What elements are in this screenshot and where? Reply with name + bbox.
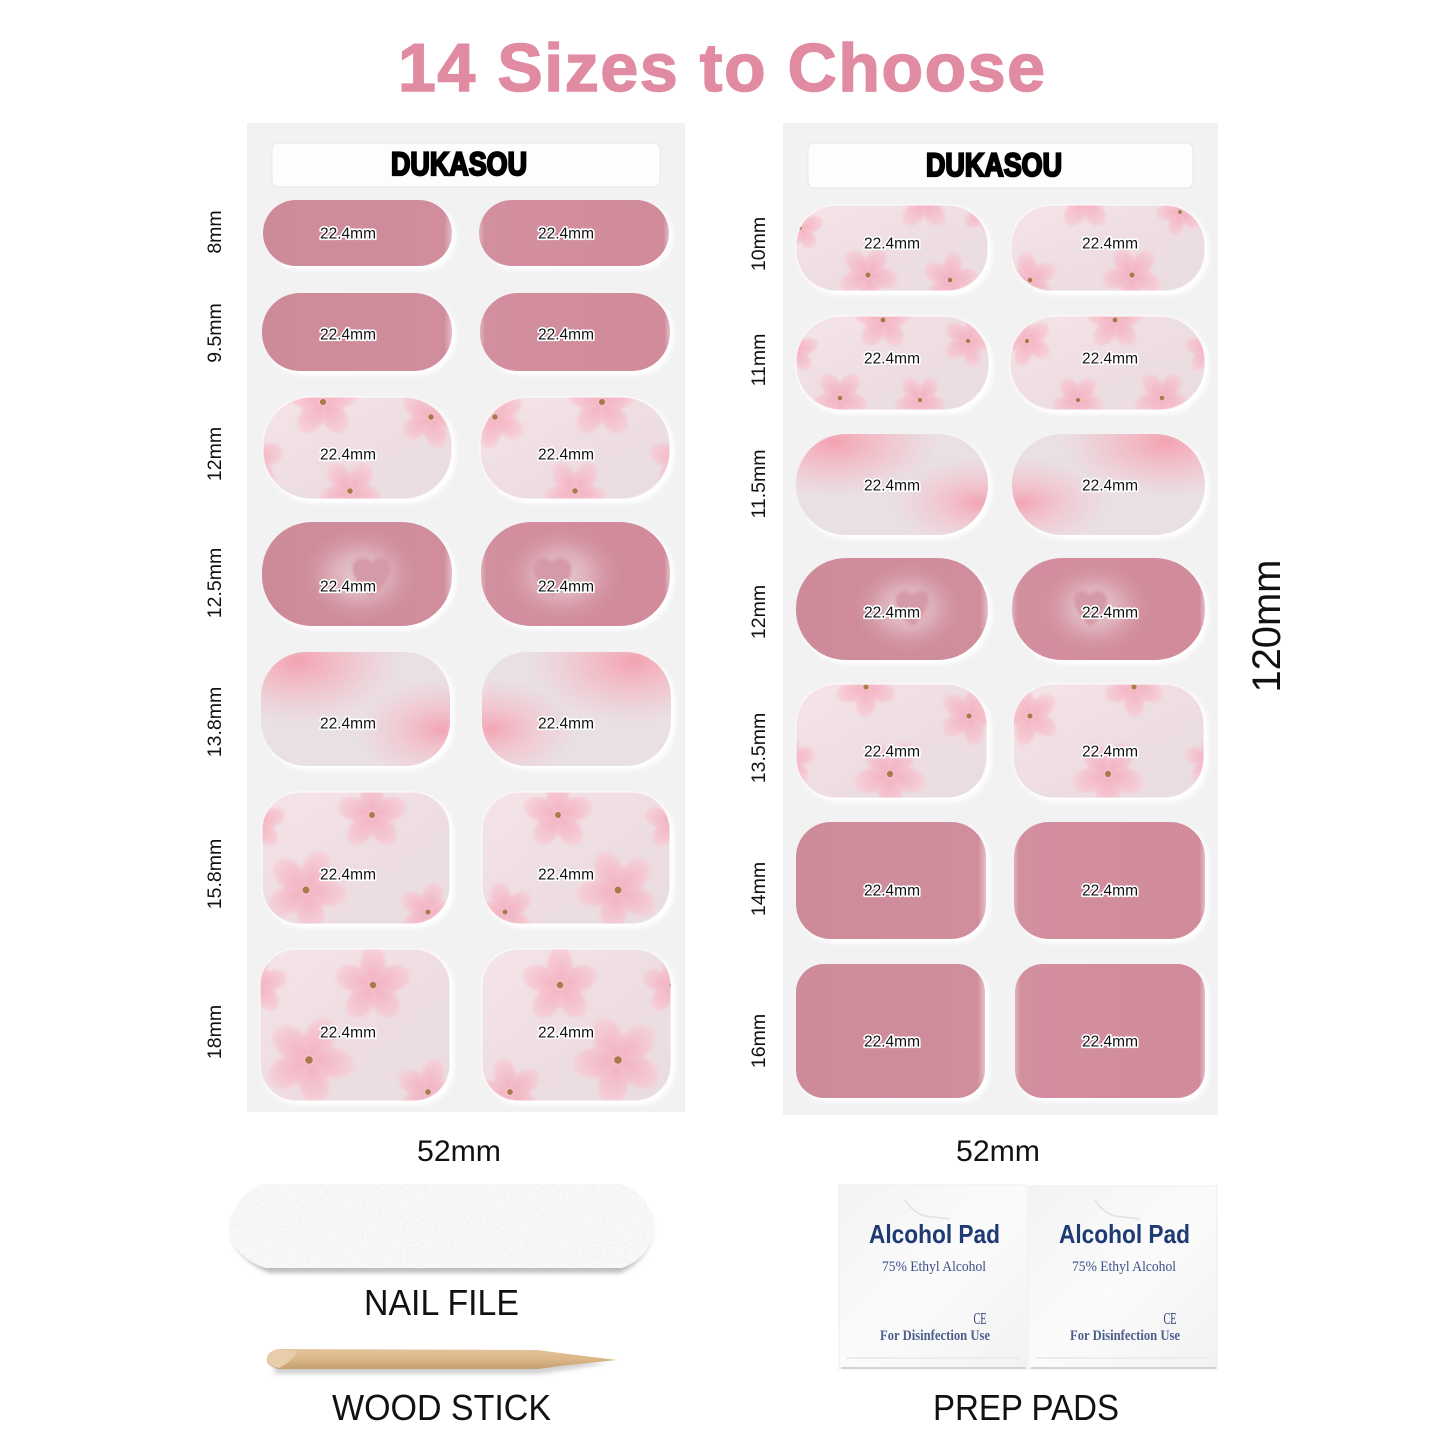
size labels: right sheet heights: 12mm [748,585,770,639]
size labels: left sheet heights [204,210,226,1059]
pad text: concentration: 75% Ethyl Alcohol [882,1259,986,1275]
sheet height dimension: 120mm [1245,560,1289,692]
nail: 11mm left floral: 22.4mm [864,350,920,368]
nail: 9.5mm left: 22.4mm [320,326,376,344]
nail: 15.8mm left floral: 22.4mm [320,866,376,884]
size labels: left sheet heights: 9.5mm [204,303,226,363]
nail: 16mm right: 22.4mm [1082,1034,1138,1050]
sheet width: right: 52mm [956,1135,1040,1168]
nail: 11.5mm right gradient: 22.4mm [1082,478,1138,494]
nail: 10mm left floral [796,205,991,294]
size labels: left sheet heights: 8mm [204,210,226,254]
nail: 9.5mm right: 22.4mm [538,326,594,344]
nail: 8mm left: 22.4mm [320,226,376,242]
size labels: left sheet heights: 13.8mm [204,687,226,757]
brand label: left sheet: DUKASOU [391,146,527,182]
nail: 11.5mm left gradient: 22.4mm [864,478,920,494]
nail: 10mm right floral: 22.4mm [1082,236,1138,252]
nail: 12.5mm right heart: 22.4mm [538,578,594,596]
nail: 8mm right: 22.4mm [538,226,594,242]
nail: 11mm right floral [1010,316,1208,413]
size labels: right sheet heights: 13.5mm [748,713,770,783]
nail: 18mm left floral: 22.4mm [320,1024,376,1042]
nail: 12mm right floral [480,397,673,502]
size labels: left sheet heights: 18mm [204,1005,226,1059]
icon: wood stick [267,1349,617,1374]
nail: 14mm left: 22.4mm [864,882,920,900]
pad text: concentration right: 75% Ethyl Alcohol [1072,1259,1176,1275]
nail: 12mm right heart [1012,558,1209,664]
nail: 11mm left floral [796,316,992,413]
nail: 12mm right heart: 22.4mm [1082,604,1138,622]
nail: 10mm right floral [1012,205,1208,294]
label: wood stick: WOOD STICK [332,1387,551,1428]
brand label: right sheet [808,143,1193,188]
nail: 9.5mm right [480,293,674,375]
nail: 16mm left: 22.4mm [864,1034,920,1050]
nail: 18mm right floral [482,949,674,1104]
nail: 18mm right floral: 22.4mm [538,1024,594,1042]
nail: 15.8mm right floral [482,792,673,927]
panel: left nail sheet [247,123,685,1112]
title: 14 Sizes to Choose [398,30,1045,106]
nail: 13.8mm left gradient [261,652,454,770]
nail: 16mm left [796,964,989,1102]
nail: 13.5mm right floral [1013,684,1207,801]
nail: 15.8mm right floral: 22.4mm [538,866,594,884]
size labels: right sheet heights: 16mm [748,1014,770,1068]
nail: 12mm right floral: 22.4mm [538,446,594,464]
nail: 13.5mm left floral [796,684,990,801]
size labels: left sheet heights: 12mm [204,427,226,481]
panel: right nail sheet [763,123,1237,1115]
nail: 11.5mm left gradient [796,434,992,539]
icon: prep pad left [839,1185,1027,1369]
label: nail file: NAIL FILE [364,1282,519,1323]
nail: 11mm right floral: 22.4mm [1082,350,1138,368]
nail: 12.5mm left heart [262,522,456,630]
pad text: use: For Disinfection Use [880,1328,990,1344]
nail: 12mm left floral [263,397,455,502]
size labels: right sheet heights [748,217,770,1068]
nail: 9.5mm left [262,293,456,375]
pad text: use right: For Disinfection Use [1070,1328,1180,1344]
nail: 15.8mm left floral [262,792,453,927]
nail: 11.5mm right gradient [1012,434,1209,539]
size labels: right sheet heights: 14mm [748,862,770,916]
nail: 18mm left floral [260,949,453,1104]
pad text: alcohol pad heading right: Alcohol Pad [1059,1219,1190,1249]
sheet width: left: 52mm [417,1135,501,1168]
nail: 12.5mm left heart: 22.4mm [320,578,376,596]
nail: 10mm left floral: 22.4mm [864,236,920,252]
size labels: right sheet heights: 11.5mm [748,450,770,518]
label: prep pads: PREP PADS [933,1387,1119,1428]
nail: 12mm left heart: 22.4mm [864,604,920,622]
nail: 13.8mm right gradient [482,652,675,770]
nail: 12mm left heart [796,558,992,664]
size labels: right sheet heights: 10mm [748,217,770,271]
size labels: left sheet heights: 12.5mm [204,548,226,618]
nail: 14mm right [1014,822,1209,943]
nail: 13.8mm right gradient: 22.4mm [538,716,594,732]
nail: 14mm right: 22.4mm [1082,882,1138,900]
size labels: right sheet heights: 11mm [748,334,770,386]
pad text: alcohol pad heading: Alcohol Pad [869,1219,1000,1249]
nail: 12mm left floral: 22.4mm [320,446,376,464]
nail: 8mm right [479,200,673,270]
nail: 13.5mm right floral: 22.4mm [1082,744,1138,760]
nail: 13.5mm left floral: 22.4mm [864,744,920,760]
nail: 12.5mm right heart [481,522,674,630]
nail: 13.8mm left gradient: 22.4mm [320,716,376,732]
nail: 14mm left [796,822,990,943]
icon: prep pad right [1029,1186,1217,1369]
brand label: left sheet [272,143,660,187]
pad mark: CE right: CE [1164,1309,1176,1328]
pad mark: CE: CE [974,1309,986,1328]
nail: 8mm left [263,200,456,270]
brand label: right sheet: DUKASOU [926,147,1062,183]
size labels: left sheet heights: 15.8mm [204,839,226,909]
nail: 16mm right [1015,964,1209,1102]
icon: nail file [229,1184,655,1273]
